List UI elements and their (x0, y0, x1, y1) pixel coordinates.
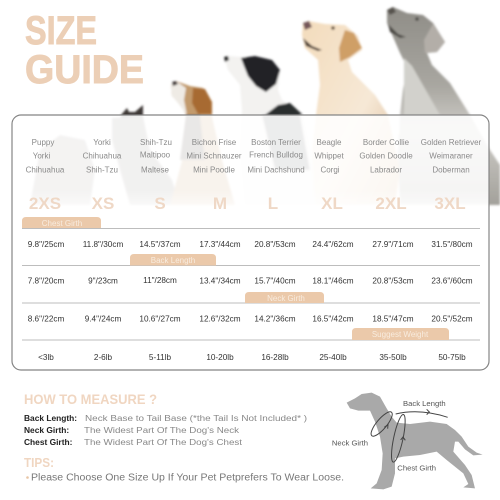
heading: tips: TIPS: (24, 455, 54, 470)
row: back length values: 20.8"/53cm (372, 276, 414, 286)
row: chest girth values: 20.8"/53cm (254, 240, 296, 249)
arrow: chest girth loop (389, 414, 408, 463)
breed lists: Yorki (33, 152, 50, 160)
text: measuring instructions: The Widest Part Of The Dog's Neck (84, 426, 240, 435)
title: size guide: GUIDE (25, 48, 144, 92)
row: neck girth values: 8.6"/22cm (28, 314, 64, 324)
row: chest girth values: 27.9"/71cm (372, 240, 414, 249)
text: measuring instructions (24, 413, 307, 447)
breed lists: Bichon Frise (192, 138, 237, 147)
row: chest girth values: 31.5"/80cm (431, 240, 473, 249)
tab: chest girth: Chest Girth (42, 219, 82, 228)
breed lists (26, 138, 482, 174)
diagram: dog measuring silhouette (332, 393, 483, 489)
arrow: neck girth loop (368, 409, 395, 439)
row: suggested weight values: 5-11lb (149, 353, 172, 362)
breed lists: French Bulldog (249, 150, 303, 160)
dog: labrador (302, 21, 400, 205)
label: chest girth: Chest Girth (397, 464, 436, 473)
dog: beagle (170, 81, 235, 205)
breed lists: Mini Poodle (193, 166, 235, 174)
row: suggested weight values: 10-20lb (206, 353, 234, 362)
row: suggested weight values: <3lb (38, 353, 54, 362)
size labels: M (213, 194, 227, 213)
tab: back length: Back Length (151, 256, 195, 265)
text: tip: Please Choose One Size Up If Your Pet Petprefers To Wear Loose. (31, 472, 344, 484)
tab: suggest weight (352, 328, 449, 340)
size labels: L (268, 194, 278, 213)
breed lists: Weimaraner (429, 152, 473, 160)
breed lists: Yorki (93, 138, 111, 147)
tab: neck girth: Neck Girth (267, 294, 305, 303)
row: chest girth values: 24.4"/62cm (312, 240, 354, 249)
tab: suggest weight: Suggest Weight (372, 330, 429, 339)
row: suggested weight values: 2-6lb (94, 353, 113, 362)
tab: chest girth (22, 217, 101, 228)
row: back length values (28, 276, 473, 286)
table rules (22, 228, 480, 340)
size labels: S (154, 194, 166, 213)
size labels: XS (92, 194, 114, 213)
heading: how to measure: HOW TO MEASURE ? (24, 391, 157, 407)
row: neck girth values: 20.5"/52cm (431, 314, 473, 324)
row: neck girth values: 18.5"/47cm (372, 314, 414, 324)
size labels: 2XL (375, 194, 407, 213)
breed lists: Shih-Tzu (86, 166, 118, 174)
text: measuring instructions: Back Length: (24, 413, 77, 423)
title: size guide: SIZE (25, 9, 97, 53)
breed lists: Mini Dachshund (247, 166, 305, 174)
row: back length values: 18.1"/46cm (312, 276, 354, 286)
breed lists: Border Collie (363, 138, 410, 147)
size labels (29, 194, 466, 213)
row: chest girth values: 9.8"/25cm (28, 240, 64, 249)
size labels: 2XS (29, 194, 61, 213)
breed lists: Boston Terrier (251, 138, 301, 147)
breed lists: Golden Doodle (359, 152, 413, 160)
dog: small pup (30, 105, 180, 205)
tab: neck girth (245, 292, 324, 303)
row: suggested weight values (38, 353, 466, 362)
row: back length values: 11"/28cm (143, 276, 177, 285)
arrow: back length (396, 409, 448, 417)
label: back length: Back Length (403, 399, 446, 408)
dog: weimaraner (387, 7, 500, 205)
breed lists: Puppy (32, 138, 54, 147)
row: back length values: 13.4"/34cm (199, 276, 241, 286)
text: measuring instructions: The Widest Part Of The Dog's Chest (84, 438, 243, 447)
row: chest girth values (28, 240, 473, 249)
dog: border collie (224, 56, 320, 205)
row: neck girth values (28, 314, 473, 324)
title: size guide (25, 9, 144, 92)
breed lists: Golden Retriever (421, 138, 482, 147)
row: back length values: 23.6"/60cm (431, 276, 473, 286)
size labels: 3XL (434, 194, 466, 213)
tab: back length (130, 254, 216, 266)
breed lists: Maltese (141, 166, 170, 174)
row: back length values: 15.7"/40cm (254, 276, 296, 286)
row: chest girth values: 14.5"/37cm (139, 240, 181, 249)
text: measuring instructions: Chest Girth: (24, 437, 72, 447)
row: neck girth values: 14.2"/36cm (254, 314, 296, 324)
breed lists: Whippet (314, 152, 344, 160)
label: neck girth: Neck Girth (332, 439, 368, 448)
panel: size table background (12, 115, 489, 370)
icon: dog silhouette (347, 393, 483, 489)
text: measuring instructions: Neck Girth: (24, 425, 69, 435)
row: suggested weight values: 25-40lb (319, 353, 347, 362)
row: neck girth values: 16.5"/42cm (312, 314, 354, 324)
breed lists: Shih-Tzu (140, 138, 172, 147)
breed lists: Mini Schnauzer (186, 152, 242, 160)
size labels: XL (321, 194, 343, 213)
row: neck girth values: 10.6"/27cm (139, 314, 181, 324)
dog photos row (30, 7, 500, 205)
breed lists: Doberman (432, 166, 470, 174)
row: suggested weight values: 35-50lb (379, 353, 407, 362)
row: back length values: 7.8"/20cm (28, 276, 64, 286)
row: chest girth values: 17.3"/44cm (199, 240, 241, 249)
breed lists: Beagle (317, 138, 342, 147)
row: neck girth values: 9.4"/24cm (85, 314, 121, 324)
breed lists: Maltipoo (140, 150, 171, 160)
row: chest girth values: 11.8"/30cm (83, 240, 123, 249)
row: back length values: 9"/23cm (88, 276, 118, 286)
breed lists: Chihuahua (26, 166, 65, 174)
row: suggested weight values: 16-28lb (261, 353, 289, 362)
row: neck girth values: 12.6"/32cm (199, 314, 241, 324)
breed lists: Labrador (370, 166, 402, 174)
breed lists: Chihuahua (83, 152, 122, 160)
breed lists: Corgi (320, 166, 340, 174)
text: measuring instructions: Neck Base to Tail Base (*the Tail Is Not Included* ) (85, 414, 307, 423)
row: suggested weight values: 50-75lb (438, 353, 466, 362)
